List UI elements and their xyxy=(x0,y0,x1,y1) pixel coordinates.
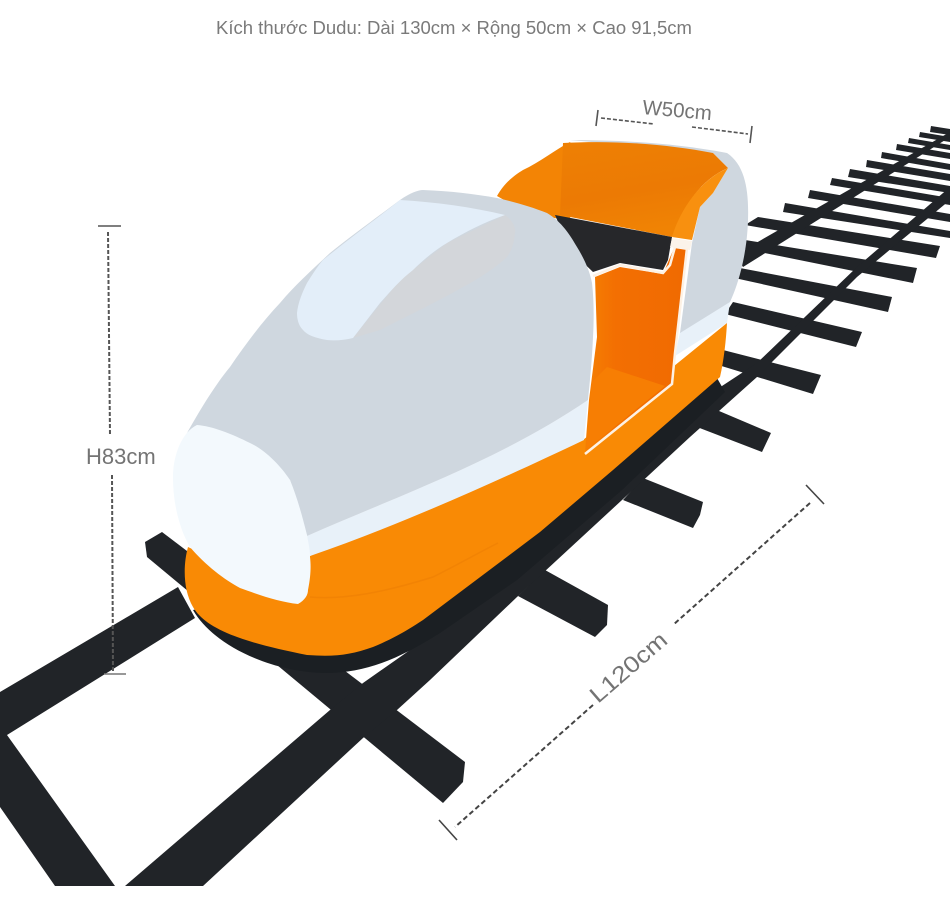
dimension: length xyxy=(439,485,824,840)
dimension: height: H83cm xyxy=(86,444,156,469)
dimension: width xyxy=(596,96,752,143)
black base xyxy=(193,378,725,673)
grey nose body xyxy=(187,190,594,536)
seat xyxy=(555,215,672,272)
title: Kích thước Dudu: Dài 130cm × Rộng 50cm × Cao 91,5cm xyxy=(216,17,692,38)
cockpit divider xyxy=(670,238,692,250)
train body xyxy=(173,140,748,673)
cockpit rear wall xyxy=(560,142,728,237)
dimension: length: L120cm xyxy=(584,626,672,708)
rear stripe xyxy=(675,302,730,356)
orange lower body xyxy=(185,323,727,656)
sleepers xyxy=(145,126,950,803)
door floor xyxy=(586,367,665,450)
door inner wall xyxy=(585,248,687,452)
lower body crease xyxy=(310,543,498,598)
white nose xyxy=(173,425,311,604)
rear grey shell xyxy=(570,140,748,333)
white stripe xyxy=(307,400,588,556)
cockpit left wall xyxy=(497,142,575,220)
cockpit right wall xyxy=(672,168,728,240)
windscreen shaded part xyxy=(353,215,515,338)
windscreen xyxy=(297,200,505,340)
dimension: width: W50cm xyxy=(642,96,713,125)
door outline xyxy=(585,247,687,454)
